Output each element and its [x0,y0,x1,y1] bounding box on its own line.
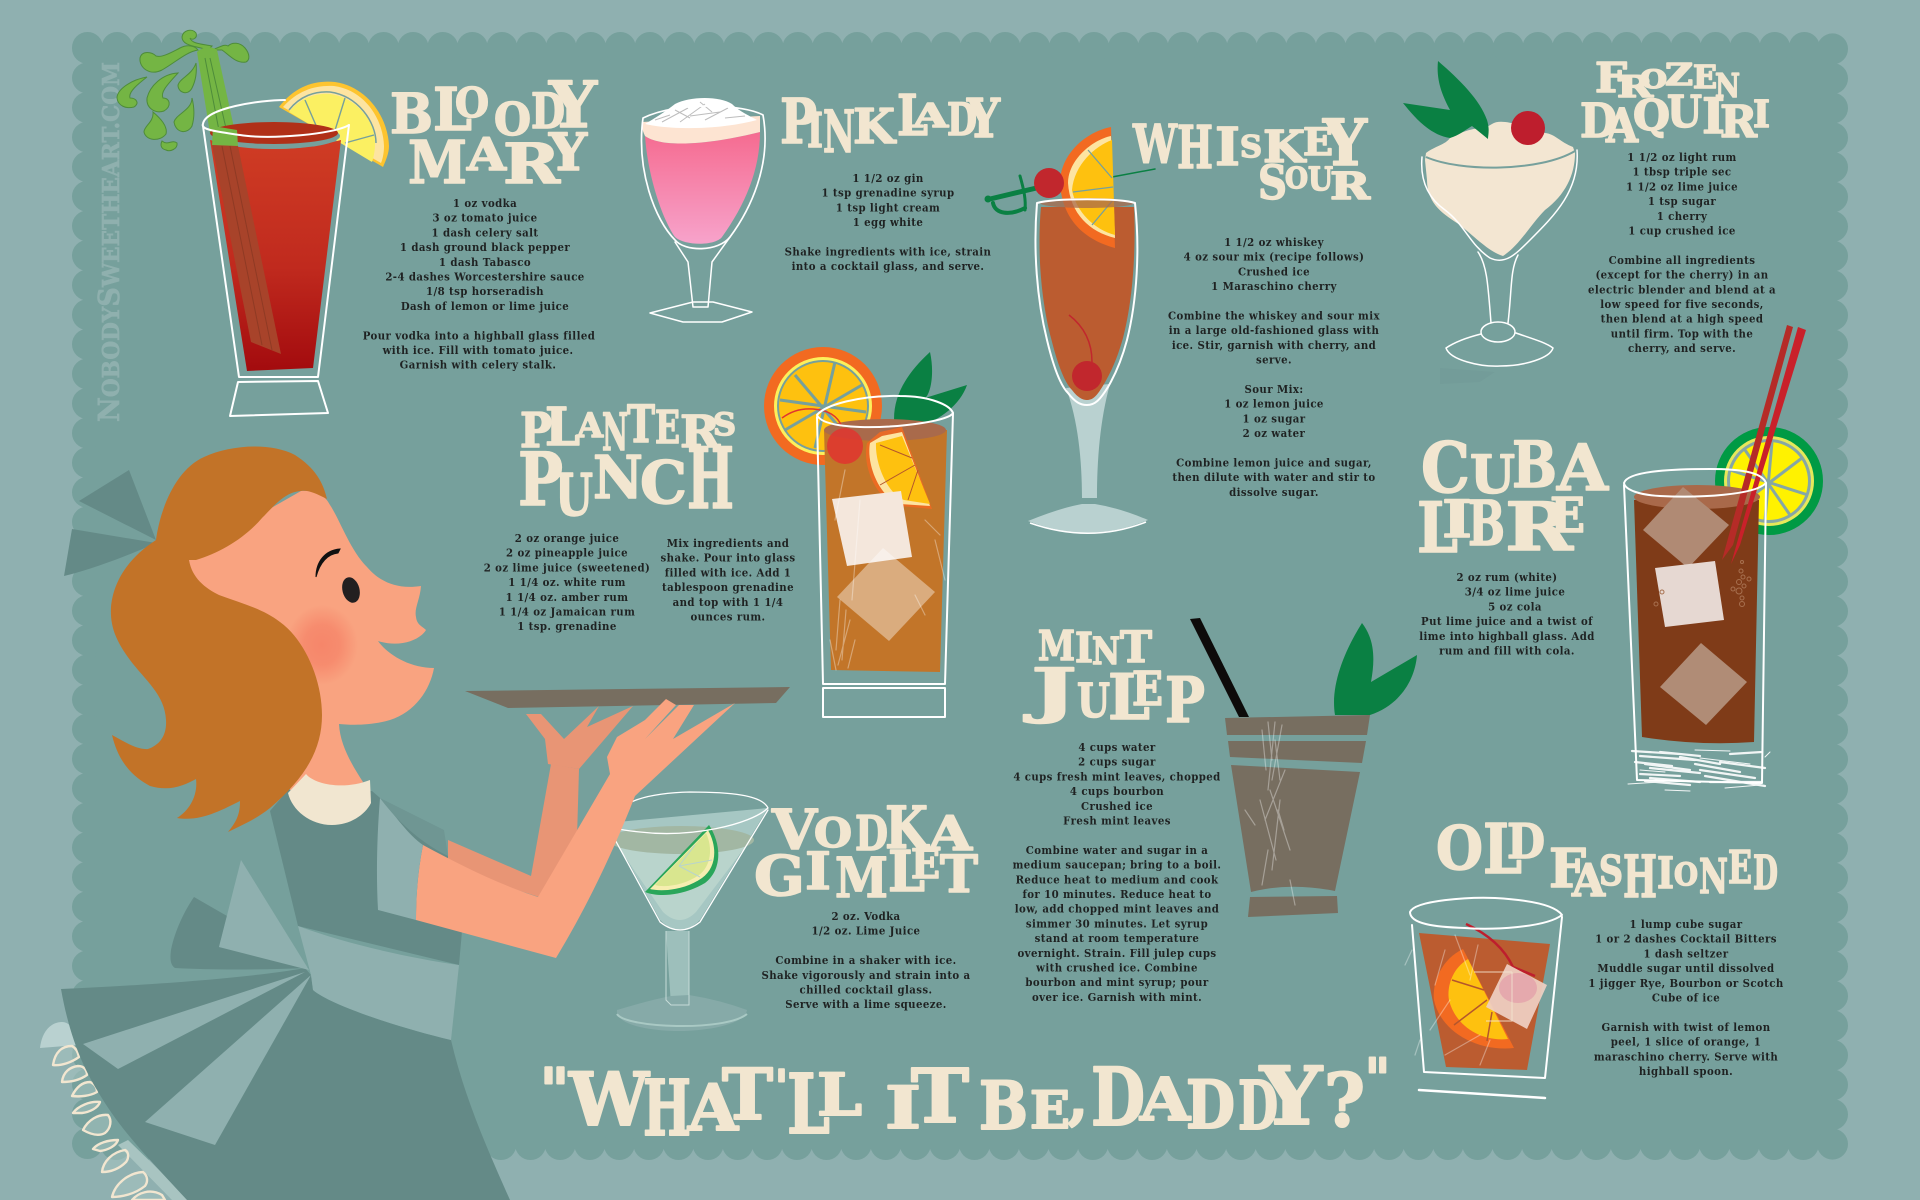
heading: Planters Punch: T [627,395,655,455]
icon: sleeve [377,798,448,920]
heading: Bloody Mary: Y [548,68,598,143]
heading: Old Fashioned: L [1483,810,1522,890]
heading: Pink Lady: N [823,98,855,166]
heading: Bloody Mary: Y [548,123,588,183]
watermark: website: NOBODYSWEETHEART.COM [92,62,126,422]
recipe: Whiskey Sour: Sour Mix: [1244,382,1304,396]
icon: hair [111,447,327,832]
heading: Cuba Libre: B [1512,428,1557,503]
heading: Mint Julep: E [1132,662,1163,717]
heading: Whiskey Sour: Y [1322,106,1368,181]
panel: Whiskey Sour [984,106,1380,533]
icon: celery stalk [197,47,238,146]
recipe: Cuba Libre: 2 oz rum (white) [1456,570,1558,584]
heading: Vodka Gimlet: K [885,794,930,862]
panel: Vodka Gimlet [607,792,978,1031]
icon: skirt [61,968,510,1200]
panel: Cuba Libre [1417,325,1823,791]
heading: Whiskey Sour: W [1132,114,1178,176]
icon: ice cubes [1643,487,1729,568]
headline: What'll it be, Daddy?: T [911,1054,969,1140]
heading: Bloody Mary: M [408,128,467,197]
recipe: Frozen Daquiri: electric blender and blend at a [1588,282,1776,296]
heading: Mint Julep: P [1165,663,1205,737]
recipe: Frozen Daquiri: low speed for five seconds, [1600,297,1764,311]
recipe: Whiskey Sour: in a large old-fashioned glass with [1169,323,1379,337]
headline: What'll it be, Daddy?: W [568,1057,650,1143]
heading: Pink Lady: L [897,83,928,149]
recipe: Whiskey Sour: Combine lemon juice and sugar, [1176,455,1372,469]
heading: Old Fashioned: I [1657,849,1674,899]
recipe: Mint Julep: medium saucepan; bring to a boil. [1013,858,1221,872]
icon: frost scratches [1628,750,1770,791]
icon: ribbon [64,470,156,576]
panel: Bloody Mary [117,30,603,416]
heading: Bloody Mary: D [531,82,565,140]
recipe: Planters Punch ingredients: 2 oz pineapple juice [506,546,628,560]
icon: ice cubes [832,491,912,566]
heading: Frozen Daquiri: R [1720,97,1757,148]
recipe: Frozen Daquiri: 1 1/2 oz light rum [1627,150,1737,164]
heading: Cuba Libre: I [1442,490,1472,550]
heading: Pink Lady: P [780,85,817,158]
recipe: Planters Punch ingredients: 2 oz orange juice [515,531,619,545]
recipe: Whiskey Sour: serve. [1256,353,1292,367]
heading: Vodka Gimlet: V [771,797,818,862]
heading: Vodka Gimlet: G [754,843,805,908]
headline: What'll it be, Daddy?: D [1091,1050,1145,1144]
panel: Pink Lady [642,83,1001,322]
recipe: Mint Julep: 4 cups bourbon [1070,784,1164,798]
headline: What'll it be, Daddy?: L [817,1061,862,1129]
heading: Old Fashioned: A [1571,854,1606,907]
heading: Bloody Mary: O [494,93,531,146]
recipe: Whiskey Sour: 2 oz water [1243,426,1306,440]
heading: Frozen Daquiri: O [1640,65,1667,94]
icon: eye [339,575,363,605]
headline: What'll it be, Daddy?: E [1030,1081,1070,1141]
icon: whiskey liquid [1039,207,1135,400]
icon: old fashioned glass [1405,898,1562,1098]
recipe: Whiskey Sour: 1 oz sugar [1243,411,1306,425]
heading: Bloody Mary: R [503,131,562,196]
icon: lemon wedge [279,82,389,167]
heading: Planters Punch: L [545,397,580,458]
recipe: Frozen Daquiri: 1 cup crushed ice [1628,224,1736,238]
recipe: Vodka Gimlet: Combine in a shaker with ice. [775,953,957,967]
recipe: Bloody Mary: with ice. Fill with tomato juice. [382,343,573,357]
icon: orange slice [764,347,882,465]
recipe: Whiskey Sour: then dilute with water and stir to [1172,470,1376,484]
heading: Old Fashioned: O [1436,814,1483,884]
heading: Pink Lady: A [912,96,949,135]
heading: Whiskey Sour: S [1240,130,1262,165]
icon: whiskey liquid [1419,933,1550,1070]
recipe: Bloody Mary: Garnish with celery stalk. [400,358,556,372]
recipe: Mint Julep: with crushed ice. Combine [1035,960,1198,974]
recipe: Planters Punch method: Mix ingredients and [667,536,789,550]
heading: Planters Punch: P [518,437,563,523]
icon: mint leaves [1403,61,1489,139]
heading: Vodka Gimlet: M [835,845,888,910]
heading: Old Fashioned: E [1728,841,1752,894]
headline: What'll it be, Daddy?: T [722,1053,773,1136]
recipe: Mint Julep: over ice. Garnish with mint. [1032,990,1202,1004]
recipe: Bloody Mary: 1 dash celery salt [432,225,538,239]
recipe: Planters Punch ingredients: 1 1/4 oz Jamaican rum [499,604,635,618]
headline: What'll it be, Daddy?: Y [1259,1049,1323,1143]
heading: Old Fashioned: D [1753,846,1778,901]
icon: blush [286,605,358,685]
heading: Bloody Mary: L [433,75,472,144]
recipe: Old Fashioned: 1 or 2 dashes Cocktail Bitters [1595,932,1777,946]
recipe: Frozen Daquiri: 1 cherry [1657,209,1708,223]
recipe: Vodka Gimlet: 1/2 oz. Lime Juice [812,924,920,938]
heading: Planters Punch: N [593,443,643,512]
recipe: Mint Julep: low, add chopped mint leaves and [1015,902,1219,916]
headline: What'll it be, Daddy?: A [1139,1065,1191,1134]
recipe: Whiskey Sour: Crushed ice [1238,264,1310,278]
icon: face [180,491,434,800]
recipe: Planters Punch method: shake. Pour into glass [661,551,795,565]
heading: Old Fashioned: D [1507,814,1545,870]
recipe: Frozen Daquiri: 1 tsp sugar [1648,194,1716,208]
panel: Frozen Daquiri [1403,54,1776,384]
heading: Planters Punch: P [520,403,552,459]
recipe: Frozen Daquiri: 1 tbsp triple sec [1632,165,1732,179]
heading: Old Fashioned: F [1549,838,1586,900]
icon: orange wedge [1060,127,1115,248]
headline: What'll it be, Daddy?: " [540,1056,569,1126]
heading: Planters Punch: E [655,401,680,454]
icon: lime wedge [645,825,718,895]
recipe: Old Fashioned: Cube of ice [1652,990,1720,1004]
icon: dress lace [40,1022,190,1200]
heading: Cuba Libre: A [1556,431,1609,506]
heading: Vodka Gimlet: D [855,806,888,862]
icon: bodice [270,790,462,965]
recipe: Pink Lady: 1 egg white [853,215,923,229]
recipe: Mint Julep: Fresh mint leaves [1063,814,1171,828]
recipe: Planters Punch ingredients: 1 tsp. grenadine [517,619,617,633]
recipe: Pink Lady: Shake ingredients with ice, strain [785,244,992,258]
headline: What'll it be, Daddy?: H [643,1064,691,1154]
heading: Old Fashioned: O [1674,857,1698,893]
heading: Planters Punch: N [602,403,628,463]
recipe: Mint Julep: Combine water and sugar in a [1026,843,1208,857]
icon: mint leaves [894,352,967,430]
icon: lime slice [1715,427,1823,535]
heading: Whiskey Sour: I [1215,117,1240,178]
heading: Mint Julep: I [1075,624,1093,672]
recipe: Bloody Mary: 2-4 dashes Worcestershire sauce [385,270,585,284]
heading: Frozen Daquiri: I [1702,87,1725,145]
recipe: Frozen Daquiri: 1 1/2 oz lime juice [1626,179,1738,193]
icon: punch liquid [824,430,947,672]
heading: Pink Lady: K [853,99,897,155]
icon: bloody mary glass [117,30,389,416]
heading: Frozen Daquiri: E [1693,58,1717,96]
heading: Cuba Libre: E [1550,488,1585,544]
headline: What'll it be, Daddy?: B [979,1067,1028,1145]
icon: martini glass [607,792,768,1031]
heading: Whiskey Sour: H [1177,113,1213,182]
heading: Bloody Mary: B [390,81,433,146]
heading: Mint Julep: T [1120,623,1152,673]
recipe: Pink Lady: 1 tsp light cream [836,200,940,214]
heading: Planters Punch: H [687,429,734,528]
recipe: Mint Julep: overnight. Strain. Fill julep cups [1017,946,1217,960]
recipe: Bloody Mary: 1 oz vodka [453,196,517,210]
heading: Whiskey Sour: S [1258,156,1287,211]
recipe: Bloody Mary: 3 oz tomato juice [432,211,538,225]
recipe: Bloody Mary: 1 dash ground black pepper [400,240,570,254]
heading: Old Fashioned: H [1623,843,1657,911]
heading: Whiskey Sour: E [1303,120,1333,164]
icon: frozen daquiri glass [1403,61,1577,384]
recipe: Mint Julep: Crushed ice [1081,799,1153,813]
heading: Vodka Gimlet: L [888,839,925,905]
headline: What'll it be, Daddy?: , [1068,1066,1088,1131]
recipe: Pink Lady: 1 1/2 oz gin [852,171,924,185]
icon: apron belt [298,926,459,1040]
heading: Whiskey Sour: U [1308,160,1333,198]
heading: Vodka Gimlet: E [911,841,940,888]
panel: Planters Punch [484,347,967,717]
heading: Vodka Gimlet: O [814,810,852,857]
icon: back arm [448,764,579,897]
recipe: Frozen Daquiri: cherry, and serve. [1628,341,1736,355]
recipe: Vodka Gimlet: chilled cocktail glass. [800,982,932,996]
heading: Frozen Daquiri: Z [1665,58,1693,93]
recipe: Whiskey Sour: Combine the whiskey and sour mix [1168,308,1380,322]
recipe: Pink Lady: into a cocktail glass, and serve. [792,259,984,273]
headline: What'll it be, Daddy?: D [1238,1066,1278,1145]
recipe: Cuba Libre: Put lime juice and a twist of [1421,614,1593,628]
recipe: Frozen Daquiri: then blend at a high speed [1601,312,1763,326]
recipe: Old Fashioned: highball spoon. [1639,1064,1733,1078]
icon: eyebrow [316,549,340,577]
recipe: Planters Punch method: tablespoon grenadine [662,580,794,594]
icon: cherry [827,428,863,464]
recipe: Mint Julep: stand at room temperature [1035,931,1199,945]
icon: orange wedge [866,427,932,509]
recipe: Frozen Daquiri: until firm. Top with the [1611,326,1753,340]
heading: Frozen Daquiri: F [1595,54,1627,102]
heading: Pink Lady: I [807,103,823,159]
icon: tomato juice [208,122,341,371]
recipe: Frozen Daquiri: (except for the cherry) in an [1595,268,1769,282]
recipe: Bloody Mary: Pour vodka into a highball glass filled [363,328,595,342]
heading: Old Fashioned: N [1699,849,1728,905]
recipe: Cuba Libre: rum and fill with cola. [1439,644,1575,658]
recipe: Whiskey Sour: 1 oz lemon juice [1224,397,1324,411]
heading: Whiskey Sour: K [1263,122,1307,173]
heading: Planters Punch: C [640,448,687,517]
recipe: Vodka Gimlet: Shake vigorously and strain into a [761,968,971,982]
heading: Whiskey Sour: O [1285,161,1308,195]
recipe: Planters Punch method: and top with 1 1/4 [673,595,783,609]
icon: cuba libre glass [1624,325,1823,791]
recipe: Old Fashioned: peel, 1 slice of orange, 1 [1611,1035,1761,1049]
heading: Mint Julep: N [1092,629,1120,673]
icon: whiskey sour flute [984,127,1155,533]
heading: Pink Lady: D [947,93,977,146]
headline: What'll it be, Daddy?: D [1186,1066,1235,1144]
icon: julep cup [1190,618,1417,917]
heading: Mint Julep: U [1077,674,1110,729]
recipe: Mint Julep: simmer 30 minutes. Let syrup [1026,916,1208,930]
recipe: Mint Julep: 2 cups sugar [1078,755,1156,769]
recipe: Mint Julep: 4 cups fresh mint leaves, chopped [1013,769,1221,783]
icon: pink lady glass [642,98,765,322]
heading: Cuba Libre: R [1505,488,1574,566]
recipe: Old Fashioned: 1 jigger Rye, Bourbon or Scotch [1588,976,1784,990]
heading: Planters Punch: U [555,461,593,529]
icon: back hand [526,706,633,769]
icon: cup scratches [1245,722,1295,905]
headline: What'll it be, Daddy?: ' [775,1060,788,1113]
heading: Whiskey Sour: R [1330,164,1370,208]
icon: mint leaves [1334,623,1417,715]
panel: Old Fashioned [1405,810,1784,1098]
recipe: Cuba Libre: 5 oz cola [1488,599,1542,613]
headline: What'll it be, Daddy?: I [885,1074,921,1142]
icon: tray [465,687,790,708]
recipe: Pink Lady: 1 tsp grenadine syrup [821,186,955,200]
heading: Old Fashioned: S [1599,847,1623,895]
icon: bubbles [1654,560,1751,606]
recipe: Mint Julep: 4 cups water [1078,740,1156,754]
heading: Cuba Libre: B [1468,487,1505,560]
heading: Planters Punch: R [680,407,720,458]
icon: cherry [1499,973,1537,1003]
recipe: Bloody Mary: 1 dash Tabasco [439,255,531,269]
heading: Frozen Daquiri: N [1715,66,1740,105]
heading: Planters Punch: S [713,407,736,443]
heading: Planters Punch: A [576,406,604,446]
recipe: Mint Julep: for 10 minutes. Reduce heat to [1022,887,1212,901]
heading: Frozen Daquiri: R [1617,70,1655,105]
recipe: Mint Julep: bourbon and mint syrup; pour [1025,975,1209,989]
heading: Frozen Daquiri: U [1667,87,1702,138]
heading: Mint Julep: M [1038,622,1075,670]
recipe: Mint Julep: Reduce heat to medium and cook [1016,872,1219,886]
icon: cola liquid [1634,500,1759,743]
recipe: Old Fashioned: Muddle sugar until dissolved [1597,961,1775,975]
heading: Cuba Libre: U [1470,445,1515,506]
recipe: Planters Punch ingredients: 1 1/4 oz. white rum [508,575,626,589]
illustration: waitress [40,447,790,1200]
recipe: Whiskey Sour: dissolve sugar. [1229,485,1319,499]
recipe: Old Fashioned: Garnish with twist of lemon [1601,1020,1771,1034]
icon: front arm [416,699,735,958]
recipe: Whiskey Sour: ice. Stir, garnish with cherry, and [1172,338,1376,352]
icon: planters punch glass [764,347,967,717]
recipe: Whiskey Sour: 4 oz sour mix (recipe follows) [1184,250,1364,264]
recipe: Planters Punch ingredients: 1 1/4 oz. amber rum [506,590,628,604]
recipe: Vodka Gimlet: 2 oz. Vodka [831,909,901,923]
icon: apron bow [83,860,311,1145]
recipe: Whiskey Sour: 1 1/2 oz whiskey [1224,235,1325,249]
headline: What'll it be, Daddy?: A [687,1071,739,1146]
recipe: Cuba Libre: lime into highball glass. Add [1419,629,1595,643]
recipe: Whiskey Sour: 1 Maraschino cherry [1211,279,1338,293]
icon: ice cube [1486,964,1547,1029]
heading: Frozen Daquiri: I [1753,92,1770,136]
heading: Cuba Libre: C [1421,428,1470,509]
heading: Bloody Mary: A [466,128,507,181]
recipe: Bloody Mary: 1/8 tsp horseradish [426,284,544,298]
heading: Vodka Gimlet: I [805,842,831,902]
recipe: Planters Punch ingredients: 2 oz lime juice (sweetened) [484,560,650,574]
heading: Cuba Libre: L [1417,488,1458,569]
heading: Bloody Mary: O [455,79,489,127]
recipe: Planters Punch method: filled with ice. Add 1 [665,565,791,579]
headline: What'll it be, Daddy?: ? [1324,1058,1365,1144]
heading: Pink Lady: Y [966,88,1001,150]
recipe: Old Fashioned: 1 dash seltzer [1643,946,1729,960]
heading: Mint Julep: J [1023,656,1077,726]
icon: black straw [1190,618,1249,717]
panel: Mint Julep [1013,618,1417,1004]
heading: Frozen Daquiri: A [1605,99,1638,154]
icon: celery leaves [117,30,249,151]
heading: Mint Julep: L [1108,660,1150,734]
icon: collar [288,774,371,825]
recipe: Frozen Daquiri: Combine all ingredients [1609,253,1755,267]
recipe: Bloody Mary: Dash of lemon or lime juice [401,299,569,313]
recipe: Cuba Libre: 3/4 oz lime juice [1465,585,1565,599]
icon: highball glass outline [203,100,349,416]
recipe: Old Fashioned: 1 lump cube sugar [1629,917,1743,931]
heading: Vodka Gimlet: T [940,845,978,905]
heading: Frozen Daquiri: D [1580,94,1617,149]
icon: red straws [1722,325,1793,560]
recipe: Planters Punch method: ounces rum. [690,610,766,624]
headline: What'll it be, Daddy?: L [787,1057,830,1153]
recipe: Vodka Gimlet: Serve with a lime squeeze. [785,997,947,1011]
heading: Frozen Daquiri: Q [1633,91,1670,140]
icon: orange wedge [1434,949,1514,1048]
headline: What'll it be, Daddy?: " [1365,1046,1390,1111]
heading: Vodka Gimlet: A [927,806,973,862]
recipe: Old Fashioned: maraschino cherry. Serve with [1594,1049,1778,1063]
icon: cocktail sword [990,169,1155,213]
